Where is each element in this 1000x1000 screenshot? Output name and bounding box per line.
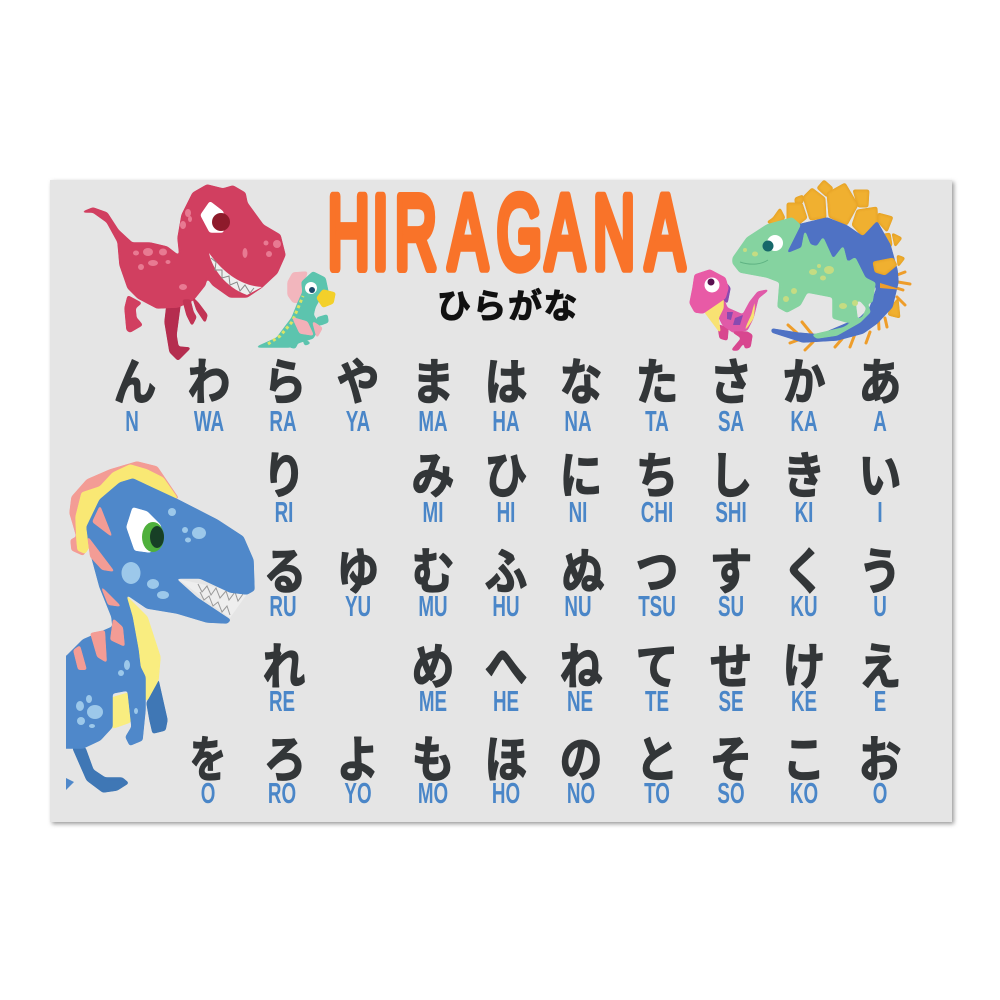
red t-rex eye [201, 202, 230, 232]
cell: い I: い [859, 448, 901, 504]
cell: る RU: る [264, 544, 306, 600]
cell: あ A: A [873, 406, 887, 438]
cell: れ RE: れ [263, 639, 305, 695]
blue dinosaur far legs [147, 680, 167, 733]
cell: む MU: む [412, 544, 454, 600]
cell: ほ HO: HO [492, 778, 520, 810]
cell: こ KO: こ [783, 732, 825, 788]
cell: ね NE: ね [560, 639, 602, 695]
cell: は HA [485, 354, 527, 438]
cell: た TA [636, 354, 678, 438]
cell: み MI: み [412, 448, 454, 504]
cell: て TE: TE [645, 686, 669, 718]
red t-rex teeth [209, 253, 262, 295]
cell: や YA: や [337, 354, 379, 410]
cell: よ YO: よ [337, 732, 379, 788]
blue dinosaur mouth [178, 579, 247, 618]
hiragana chart [114, 354, 901, 810]
cell: に NI [560, 448, 602, 529]
cell: り RI: RI [275, 497, 293, 529]
blue dinosaur crest [70, 462, 178, 555]
blue dinosaur body [56, 479, 254, 748]
title: HIRAGANA [328, 174, 685, 290]
cell: む MU: MU [418, 591, 448, 623]
cell: あ A: あ [859, 354, 901, 410]
cell: わ WA: WA [194, 406, 224, 438]
row 2: i-row [263, 448, 901, 529]
cell: か KA [783, 354, 825, 438]
cell: ほ HO: ほ [485, 732, 527, 788]
cell: に NI: NI [569, 497, 587, 529]
cell: の NO: NO [567, 778, 595, 810]
row 3: u-row [264, 544, 901, 623]
cell: ゆ YU: ゆ [337, 544, 379, 600]
row 5: o-row [190, 732, 901, 810]
cell: く KU: KU [790, 591, 818, 623]
cell: の NO: の [560, 732, 602, 788]
icon: red t-rex [83, 185, 285, 360]
cell: わ WA: わ [188, 354, 230, 410]
cell: も MO: も [412, 732, 454, 788]
cell: ま MA [412, 354, 454, 438]
cell: ん N: ん [114, 354, 156, 410]
cell: け KE: け [783, 639, 825, 695]
cell: は HA: HA [492, 406, 520, 438]
stegosaurus back plates [767, 180, 905, 318]
cell: た TA: TA [645, 406, 669, 438]
row 4: e-row [263, 639, 901, 718]
cell: ん N: N [125, 406, 139, 438]
cell: は HA: は [485, 354, 527, 410]
cell: よ YO: YO [344, 778, 372, 810]
cell: ろ RO: RO [268, 778, 296, 810]
cell: し SHI: し [710, 448, 752, 504]
cell: か KA: KA [790, 406, 818, 438]
cell: お O: お [859, 732, 901, 788]
cell: ひ HI: ひ [485, 448, 527, 504]
cell: わ WA [188, 354, 230, 438]
cell: か KA: か [783, 354, 825, 410]
cell: ろ RO: ろ [264, 732, 306, 788]
cell: れ RE: RE [269, 686, 295, 718]
cell: う U: U [873, 591, 887, 623]
icon: green stegosaurus [733, 180, 910, 350]
cell: と TO: と [636, 732, 678, 788]
cell: と TO: TO [644, 778, 670, 810]
cell: こ KO: KO [790, 778, 818, 810]
cell: そ SO: SO [717, 778, 745, 810]
cell: め ME: め [412, 639, 454, 695]
cell: ふ HU: ふ [485, 544, 527, 600]
cell: ま MA: ま [412, 354, 454, 410]
cell: ま MA: MA [418, 406, 448, 438]
cell: を O: を [190, 733, 226, 788]
cell: て TE: て [636, 639, 678, 695]
row 1: a-row [114, 354, 901, 438]
poster panel [50, 180, 954, 824]
cell: つ TSU: TSU [638, 591, 676, 623]
cell: る RU: RU [269, 591, 297, 623]
cell: や YA: YA [346, 406, 370, 438]
icon: small teal dinosaur [257, 272, 335, 348]
cell: に NI: に [560, 448, 602, 504]
cell: え E: え [859, 639, 901, 695]
cell: ら RA [264, 354, 306, 438]
cell: け KE: KE [791, 686, 817, 718]
cell: つ TSU: つ [636, 544, 678, 600]
cell: ね NE: NE [567, 686, 593, 718]
cell: め ME: ME [419, 686, 447, 718]
cell: ち CHI: ち [636, 448, 678, 504]
cell: あ A [859, 354, 901, 438]
cell: ち CHI: CHI [641, 497, 673, 529]
cell: へ HE: HE [493, 686, 519, 718]
cell: さ SA: さ [710, 354, 752, 410]
blue dinosaur stripes [73, 505, 125, 670]
cell: き KI: き [783, 448, 825, 504]
cell: き KI [783, 448, 825, 529]
cell: さ SA [710, 354, 752, 438]
cell: え E: E [874, 686, 886, 718]
cell: ら RA: RA [269, 406, 297, 438]
cell: ふ HU: HU [492, 591, 520, 623]
cell: せ SE: SE [718, 686, 744, 718]
blue dinosaur chest [127, 596, 161, 700]
stegosaurus green body [733, 218, 875, 338]
cell: さ SA: SA [718, 406, 744, 438]
cell: い I: I [877, 497, 883, 529]
cell: く KU: く [783, 544, 825, 600]
stegosaurus blue back [772, 218, 898, 342]
cell: ぬ NU: NU [564, 591, 592, 623]
cell: せ SE: せ [710, 639, 752, 695]
cell: ち CHI [636, 448, 678, 529]
cell: も MO: MO [418, 778, 448, 810]
cell: う U: う [859, 544, 901, 600]
cell: ん N [114, 354, 156, 438]
stegosaurus tail spikes [788, 272, 910, 350]
cell: た TA: た [636, 354, 678, 410]
blue dinosaur eye [127, 508, 164, 552]
cell: す SU: SU [718, 591, 744, 623]
cell: し SHI: SHI [715, 497, 747, 529]
cell: や YA [337, 354, 379, 438]
cell: を O: O [201, 778, 215, 810]
cell: み MI: MI [423, 497, 443, 529]
cell: り RI [263, 448, 305, 529]
cell: ゆ YU: YU [345, 591, 371, 623]
cell: き KI: KI [795, 497, 813, 529]
cell: い I [859, 448, 901, 529]
cell: お O: O [873, 778, 887, 810]
cell: り RI: り [263, 448, 305, 504]
cell: な NA: な [560, 354, 602, 410]
icon: small pink dinosaur [690, 270, 768, 350]
icon: blue dinosaur [56, 462, 254, 792]
subtitle: ひらがな [437, 287, 579, 326]
cell: す SU: す [710, 544, 752, 600]
blue dinosaur scales [76, 508, 206, 728]
cell: な NA [560, 354, 602, 438]
cell: な NA: NA [564, 406, 592, 438]
cell: へ HE: へ [485, 639, 527, 695]
cell: ひ HI [485, 448, 527, 529]
cell: み MI [412, 448, 454, 529]
cell: し SHI [710, 448, 752, 529]
cell: ひ HI: HI [497, 497, 515, 529]
cell: そ SO: そ [710, 732, 752, 788]
cell: ぬ NU: ぬ [562, 544, 604, 600]
cell: ら RA: ら [264, 354, 306, 410]
